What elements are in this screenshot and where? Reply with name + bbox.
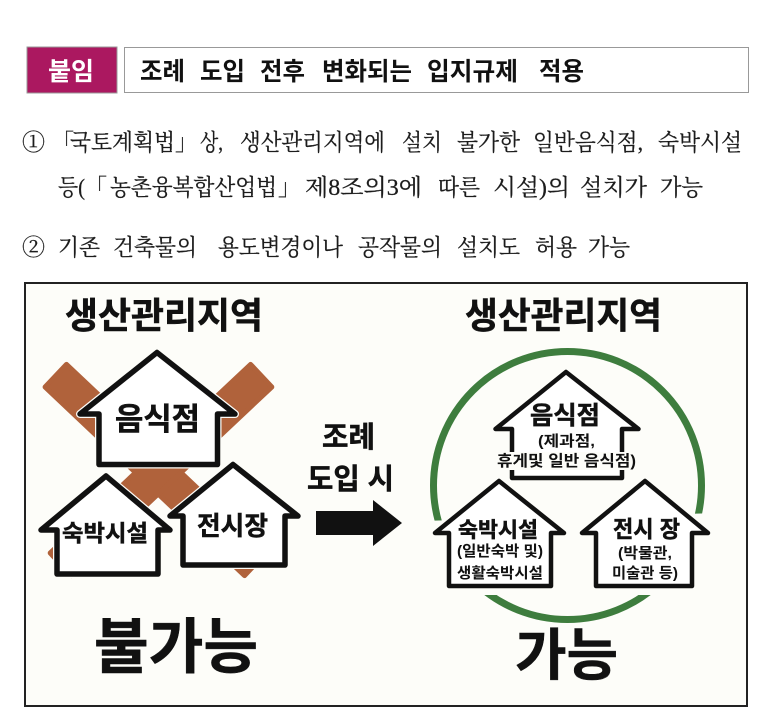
icon: brown prohibition X [45, 364, 272, 576]
header: title bar: 조례 [140, 58, 185, 86]
label: when ordinance is introduced [307, 421, 394, 496]
panel: before ordinance [41, 295, 298, 681]
text block: item 1: 일반음식점, [533, 130, 643, 155]
text block: item 1: 」 [278, 175, 301, 200]
text block: item 1: 설치 [402, 130, 442, 155]
text block: item 1: 생산관리지역에 [240, 130, 385, 155]
heading: production management area (before): 생산관리지역 [65, 295, 263, 336]
icon: house exhibition hall [170, 464, 298, 565]
arrow: before to after [316, 500, 402, 546]
text block: item 2: 건축물의 [113, 235, 197, 260]
label: possible: 가능 [515, 624, 618, 687]
icon: house restaurant: 휴게및 일반 음식점) [497, 452, 636, 470]
header: title bar: 변화되는 [322, 58, 412, 86]
header: title bar: 입지규제 [427, 58, 518, 86]
text block: item 2: 기존 [58, 235, 100, 260]
icon: house restaurant: (제과점, [538, 433, 595, 450]
icon: house lodging: 생활숙박시설 [457, 565, 543, 582]
icon: house lodging: 숙박시설 [458, 519, 538, 542]
text block: item 2: 설치도 [457, 235, 520, 260]
icon: house lodging: (일반숙박 및) [457, 543, 543, 560]
heading: production management area (after): 생산관리지역 [465, 295, 662, 336]
text block: item 1: 설치가 [580, 175, 648, 200]
text block: item 1: 따른 [438, 175, 480, 200]
text block: item 2 [22, 235, 630, 260]
icon: house exhibition hall: 전시장 [197, 511, 268, 541]
text block: item 1: 「 [51, 130, 74, 155]
text block: item 2: 공작물의 [358, 235, 442, 260]
label: when ordinance is introduced: 조례 [322, 421, 375, 454]
text block: item 1: 농촌융복합산업법 [110, 175, 277, 200]
text block: item 1: 등( [58, 175, 85, 200]
panel: after ordinance [434, 295, 708, 687]
header: title bar: 도입 [200, 58, 245, 86]
header: title bar: 적용 [539, 58, 584, 86]
text block: item 2: 용도변경이나 [218, 235, 344, 260]
icon: house restaurant [80, 352, 235, 464]
text block: item 1: 제8조의3에 [305, 175, 422, 200]
text block: item 1: 상, [200, 130, 223, 155]
text block: item 1: 국토계획법 [70, 130, 175, 155]
text block: item 1 [22, 130, 742, 200]
text block: item 2: ② [22, 235, 45, 260]
icon: house lodging [41, 476, 170, 574]
label: when ordinance is introduced: 도입 시 [307, 463, 394, 496]
header: title bar: 전후 [260, 58, 305, 86]
icon: house exhibition hall: 미술관 등) [612, 565, 678, 582]
header: attachment tag [27, 47, 117, 93]
text block: item 1: 「 [84, 175, 107, 200]
text block: item 1: 가능 [660, 175, 703, 200]
icon: house restaurant: 음식점 [530, 402, 600, 430]
icon: house exhibition hall: 전시 장 [613, 516, 680, 542]
icon: house restaurant: 음식점 [115, 402, 200, 437]
text block: item 1: 숙박시설 [658, 130, 742, 155]
header: attachment tag: 붙임 [48, 58, 94, 86]
icon: house exhibition hall [582, 481, 708, 586]
text block: item 1: 시설)의 [493, 175, 570, 200]
panel: before and after diagram [25, 283, 747, 706]
text block: item 1: ① [22, 130, 45, 155]
icon: house exhibition hall: (박물관, [618, 545, 672, 562]
text block: item 1: 불가한 [457, 130, 521, 155]
text block: item 1: 」 [175, 130, 198, 155]
icon: green permitted circle [434, 352, 702, 620]
header: title bar [124, 48, 748, 92]
icon: house lodging [435, 481, 564, 586]
text block: item 2: 허용 [535, 235, 577, 260]
icon: house restaurant [496, 372, 638, 478]
label: impossible: 불가능 [94, 614, 258, 681]
text block: item 2: 가능 [588, 235, 630, 260]
icon: house lodging: 숙박시설 [62, 520, 148, 546]
